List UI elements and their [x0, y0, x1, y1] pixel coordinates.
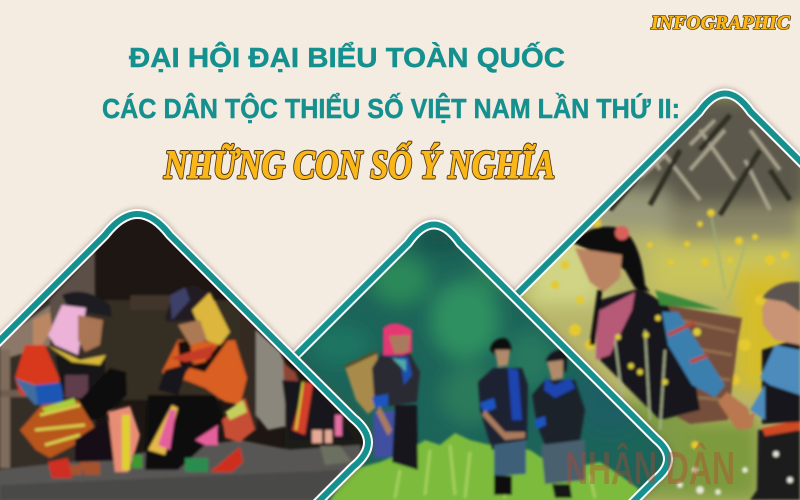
girl in middle — [478, 338, 528, 495]
basket — [665, 305, 742, 424]
white blossoms — [677, 451, 793, 495]
foliage over woman — [655, 290, 720, 310]
woman body — [600, 288, 700, 420]
ground — [0, 440, 370, 500]
woman with basket — [345, 323, 420, 470]
photo panel: two women sewing in doorway — [0, 200, 380, 500]
third figure skirt — [282, 380, 355, 465]
girl at right — [532, 350, 585, 498]
subtitle: NHỮNG CON SỐ Ý NGHĨA — [163, 142, 555, 187]
title line 1: ĐẠI HỘI ĐẠI BIỂU TOÀN QUỐC — [129, 41, 565, 73]
label: infographic: INFOGRAPHIC — [650, 13, 791, 34]
photo panel: mother and child in flower field — [512, 85, 800, 500]
title line 2: CÁC DÂN TỘC THIỂU SỐ VIỆT NAM LẦN THỨ II: — [102, 92, 680, 124]
label: infographic: INFOGRAPHIC — [650, 13, 791, 34]
subtitle: NHỮNG CON SỐ Ý NGHĨA — [163, 142, 555, 187]
photo panel: women and girls in green terraces — [291, 216, 675, 500]
tree branches — [628, 120, 780, 210]
rice grass — [330, 433, 640, 500]
woman head — [573, 227, 650, 292]
wall and doorway — [0, 280, 95, 470]
left woman — [15, 292, 142, 478]
flowers — [551, 209, 789, 449]
child — [750, 425, 800, 500]
right woman — [145, 285, 255, 472]
